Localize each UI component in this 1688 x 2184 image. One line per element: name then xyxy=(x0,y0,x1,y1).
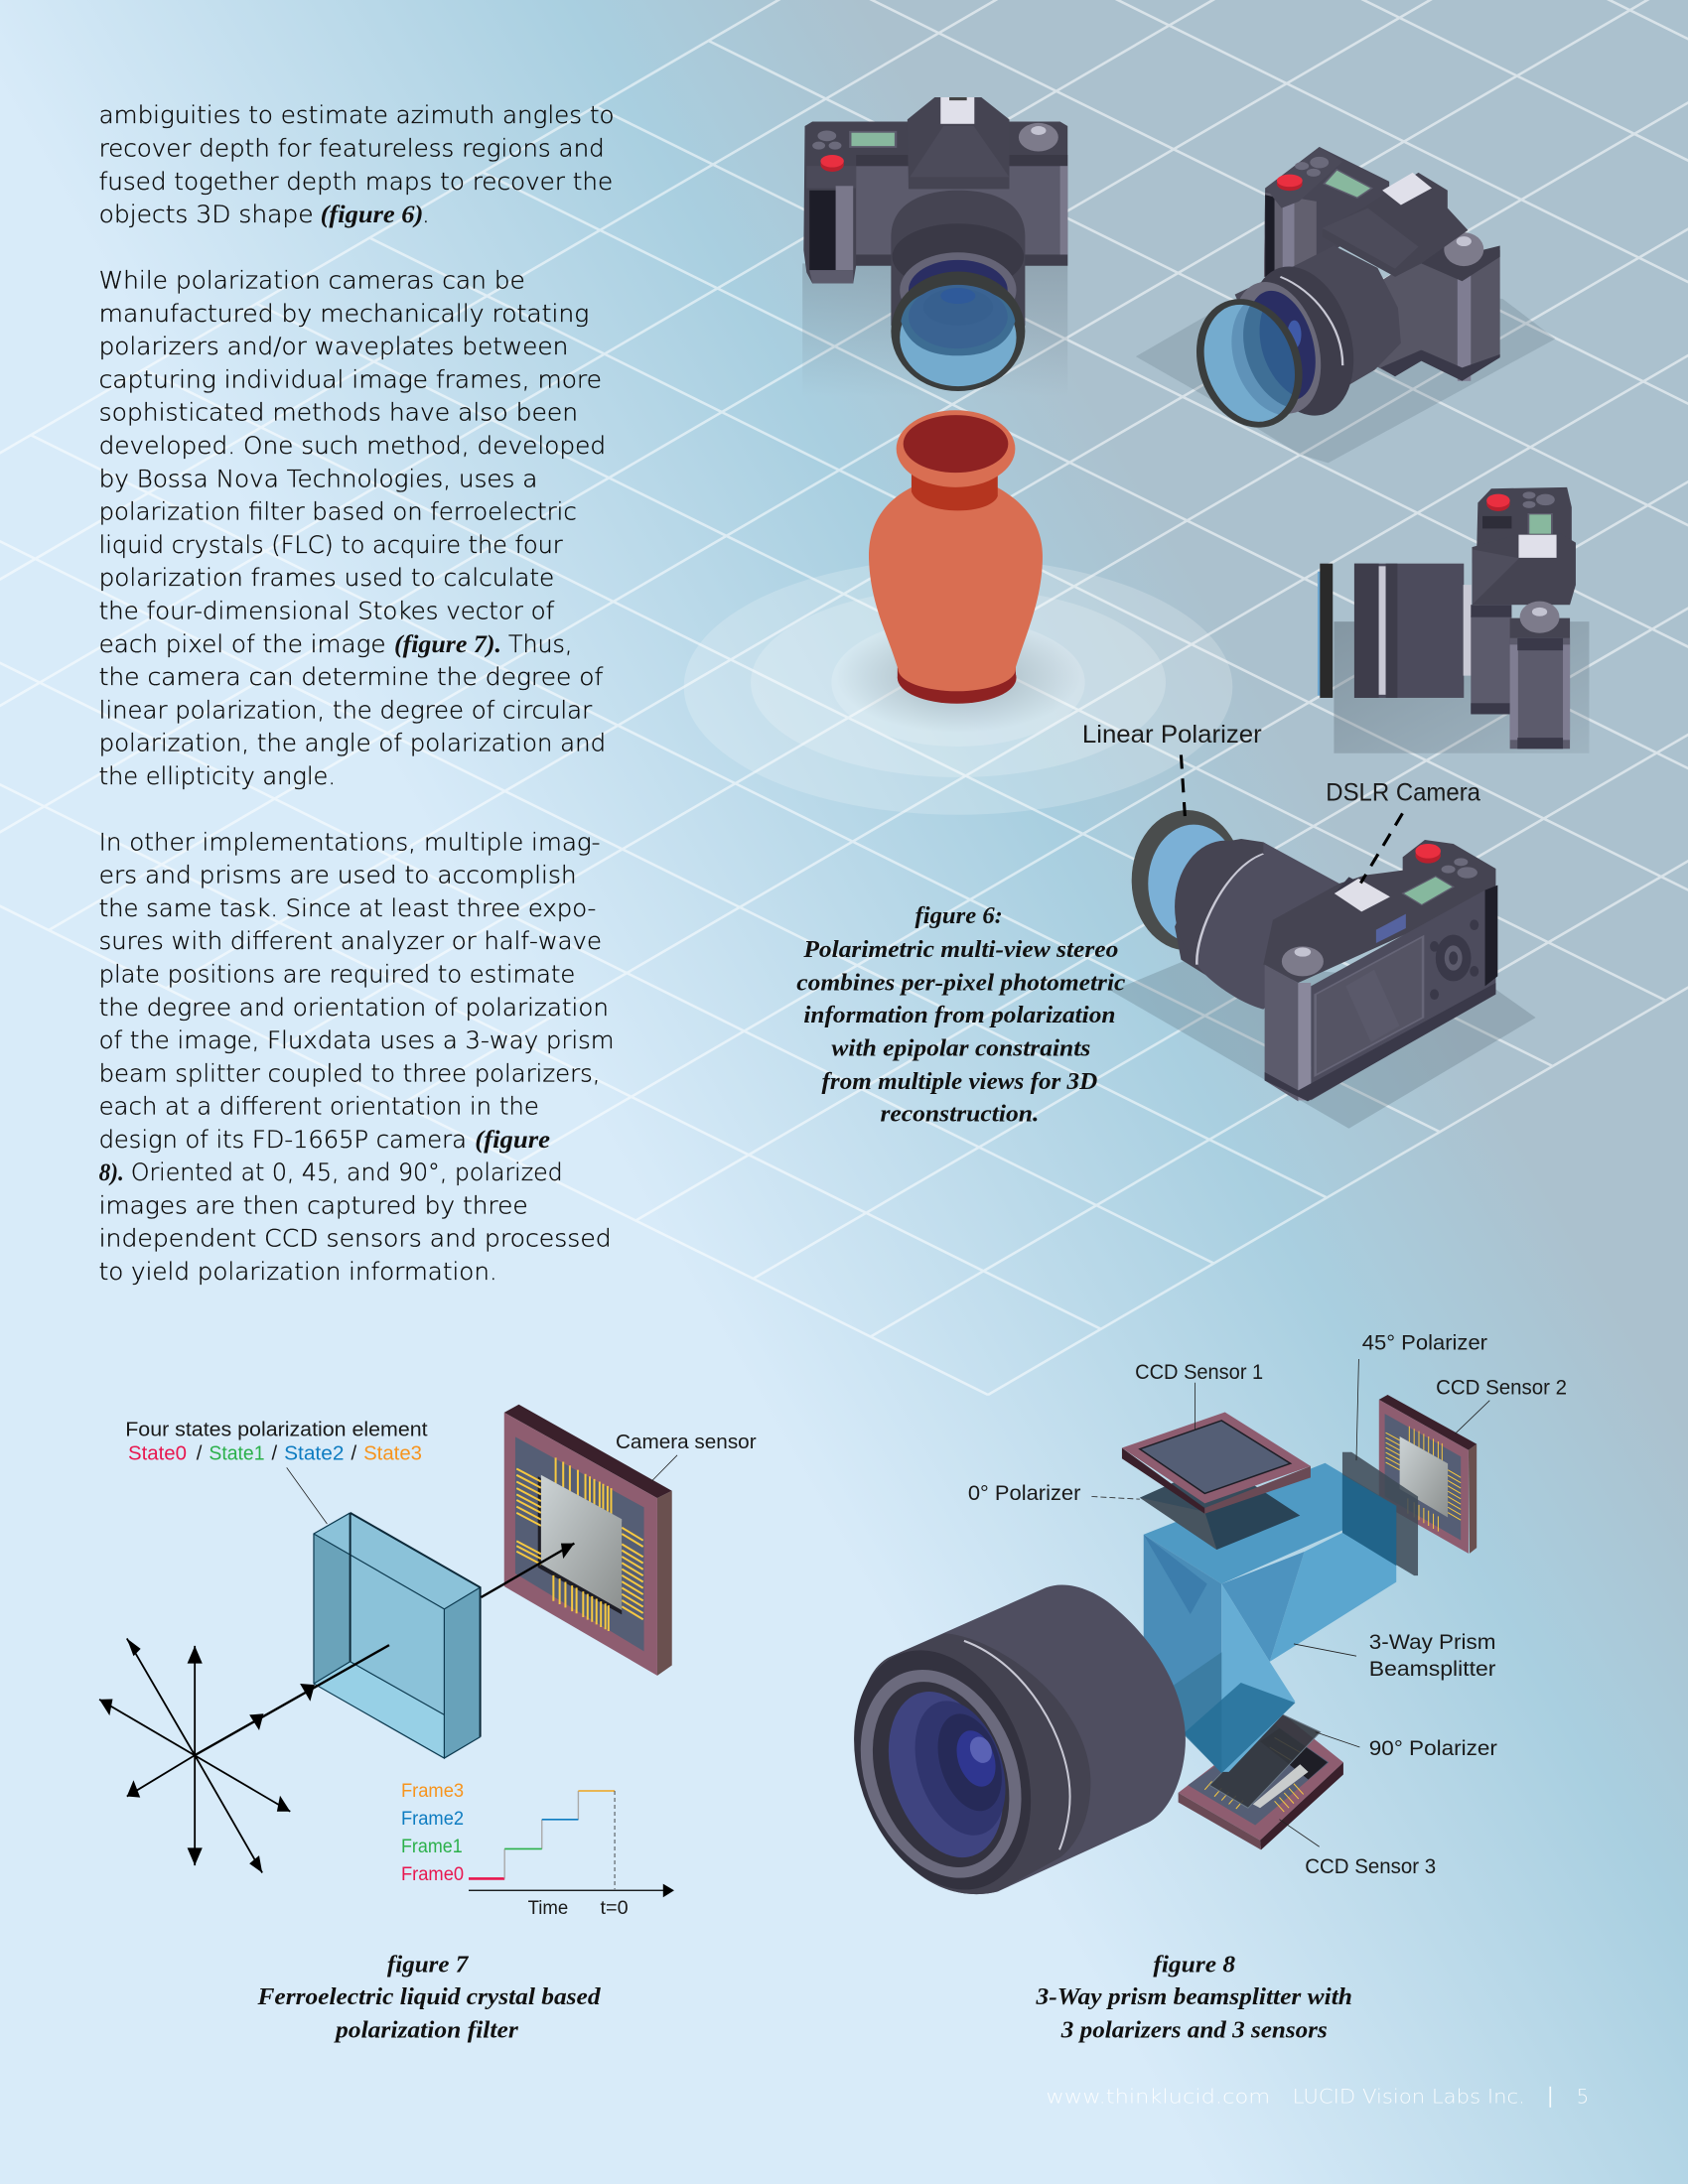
figure 8 labels: Beamsplitter xyxy=(1369,1658,1495,1681)
figure 7 labels: State3 xyxy=(363,1442,422,1464)
figure 7 caption xyxy=(256,1952,601,2044)
body text column: (figure 7). xyxy=(394,630,501,658)
figure 6 labels: Linear Polarizer xyxy=(1082,721,1262,749)
icon: terracotta vase xyxy=(869,410,1043,704)
body text column: each at a different orientation in the xyxy=(99,1092,539,1121)
CCD sensor 1 xyxy=(1122,1413,1311,1514)
body text column: polarizers and/or waveplates between xyxy=(99,332,568,360)
figure 7 labels: / xyxy=(272,1442,278,1464)
footer: 5 xyxy=(1577,2086,1589,2109)
figure 7 labels: Camera sensor xyxy=(616,1432,757,1453)
figure 7 caption: figure 7 xyxy=(387,1952,470,1979)
body text column: linear polarization, the degree of circular xyxy=(99,695,592,724)
45 degree polarizer xyxy=(1342,1452,1418,1575)
figure 8 labels: 3-Way Prism xyxy=(1369,1631,1495,1654)
figure 8 caption: 3 polarizers and 3 sensors xyxy=(1060,2017,1328,2044)
body text column: liquid crystals (FLC) to acquire the four xyxy=(99,530,563,559)
body text column: 8). xyxy=(99,1159,124,1186)
body text column: of the image, Fluxdata uses a 3-way prism xyxy=(99,1025,615,1054)
figure 7 labels: Frame0 xyxy=(401,1864,464,1885)
body text column: design of its FD-1665P camera xyxy=(99,1125,467,1154)
figure 6 caption: reconstruction. xyxy=(880,1100,1039,1127)
icon: camera three-quarter view xyxy=(1136,147,1555,463)
figure 7 labels: Four states polarization element xyxy=(125,1420,428,1441)
figure 8 labels: 90° Polarizer xyxy=(1369,1737,1497,1760)
footer: LUCID Vision Labs Inc. xyxy=(1293,2086,1525,2109)
body text column: objects 3D shape xyxy=(99,200,314,228)
figure 6 caption: from multiple views for 3D xyxy=(822,1068,1097,1095)
body text column: Thus, xyxy=(508,629,572,658)
figure 7 labels: / xyxy=(351,1442,356,1464)
polarization element block xyxy=(314,1513,481,1758)
figure 8 labels xyxy=(968,1332,1567,1878)
figure 8 caption xyxy=(1036,1952,1352,2044)
body text column: images are then captured by three xyxy=(99,1190,528,1219)
figure 8 labels: 45° Polarizer xyxy=(1362,1332,1487,1355)
figure 7 caption: polarization filter xyxy=(334,2017,518,2044)
figure 7 labels: Frame1 xyxy=(401,1837,463,1857)
body text column: sures with different analyzer or half-wave xyxy=(99,926,602,955)
body text column xyxy=(99,100,615,1286)
body text column: plate positions are required to estimate xyxy=(99,959,575,988)
vase ground ripples xyxy=(684,559,1232,815)
body text column: to yield polarization information. xyxy=(99,1257,497,1286)
lens barrel xyxy=(828,1584,1186,1903)
body text column: beam splitter coupled to three polarizers, xyxy=(99,1058,601,1087)
footer xyxy=(1046,2086,1589,2109)
body text column: capturing individual image frames, more xyxy=(99,364,602,393)
body text column: . xyxy=(422,200,430,228)
figure 7 labels: Frame3 xyxy=(401,1781,464,1802)
figure 6 caption: combines per-pixel photometric xyxy=(796,970,1125,997)
figure 7 caption: Ferroelectric liquid crystal based xyxy=(256,1983,601,2010)
icon: camera side view xyxy=(1318,487,1589,753)
callout leader: DSLR camera xyxy=(1360,813,1402,884)
figure 8 labels: CCD Sensor 1 xyxy=(1135,1361,1263,1384)
figure 7 labels: State0 xyxy=(128,1442,187,1464)
figure 8 labels: CCD Sensor 2 xyxy=(1436,1376,1567,1399)
figure 8 labels: 0° Polarizer xyxy=(968,1482,1080,1505)
figure 7 labels: / xyxy=(197,1442,203,1464)
body text column: the same task. Since at least three expo- xyxy=(99,893,596,922)
0 degree polarizer leader xyxy=(1091,1496,1140,1499)
figure 8: three-way prism beamsplitter diagram xyxy=(828,1359,1489,1903)
body text column: independent CCD sensors and processed xyxy=(99,1224,612,1253)
body text column: fused together depth maps to recover the xyxy=(99,167,613,196)
body text column: polarization, the angle of polarization and xyxy=(99,729,606,757)
figure 7: ferroelectric polarization filter diagram xyxy=(99,1405,677,1897)
body text column: the camera can determine the degree of xyxy=(99,662,604,691)
figure 6 caption: information from polarization xyxy=(803,1002,1116,1028)
body text column: (figure xyxy=(475,1126,550,1154)
figure 6 caption: figure 6: xyxy=(915,902,1003,929)
body text column: by Bossa Nova Technologies, uses a xyxy=(99,464,537,492)
body text column: each pixel of the image xyxy=(99,629,386,658)
90 degree polarizer xyxy=(1209,1713,1321,1808)
figure 6 caption: with epipolar constraints xyxy=(831,1035,1090,1062)
body text column: polarization frames used to calculate xyxy=(99,563,554,592)
polarization arrows xyxy=(99,1544,574,1873)
leader lines xyxy=(1196,1359,1489,1846)
figure 6 caption: Polarimetric multi-view stereo xyxy=(802,936,1118,963)
figure 6 labels xyxy=(1082,721,1481,807)
icon: camera front view xyxy=(802,97,1067,396)
0 degree polarizer xyxy=(1140,1462,1300,1550)
body text column: ambiguities to estimate azimuth angles to xyxy=(99,100,615,129)
figure 7 labels xyxy=(125,1420,757,1919)
leader lines xyxy=(287,1455,677,1524)
body text column: the ellipticity angle. xyxy=(99,761,336,790)
figure 6 labels: DSLR Camera xyxy=(1326,779,1481,807)
CCD sensor 3 xyxy=(1179,1713,1343,1849)
figure 7 labels: Frame2 xyxy=(401,1809,464,1830)
figure 8 labels: CCD Sensor 3 xyxy=(1305,1855,1436,1878)
body text column: manufactured by mechanically rotating xyxy=(99,299,589,328)
figure 7 labels: Time xyxy=(528,1898,568,1919)
camera sensor xyxy=(504,1405,672,1676)
body text column: sophisticated methods have also been xyxy=(99,398,578,427)
body text column: While polarization cameras can be xyxy=(99,266,525,295)
callout leader: linear polarizer xyxy=(1181,754,1186,820)
body text column: ers and prisms are used to accomplish xyxy=(99,861,577,889)
figure 7 labels: State2 xyxy=(284,1442,344,1464)
frame timing chart xyxy=(469,1791,674,1897)
figure 6 scene: three cameras and vase xyxy=(802,97,1589,753)
figure 7 labels: State1 xyxy=(209,1442,265,1464)
body text column: the degree and orientation of polarization xyxy=(99,993,609,1022)
body text column: (figure 6) xyxy=(321,201,423,228)
icon: camera rear view with linear polarizer xyxy=(1111,810,1536,1129)
body text column: recover depth for featureless regions and xyxy=(99,133,605,162)
body text column: Oriented at 0, 45, and 90°, polarized xyxy=(131,1158,563,1186)
body text column: In other implementations, multiple imag- xyxy=(99,827,601,856)
three-way prism xyxy=(1144,1463,1397,1773)
body text column: the four-dimensional Stokes vector of xyxy=(99,596,555,624)
body text column: developed. One such method, developed xyxy=(99,431,606,460)
figure 7 labels: t=0 xyxy=(601,1898,629,1919)
footer: www.thinklucid.com xyxy=(1046,2086,1270,2109)
body text column: polarization filter based on ferroelectric xyxy=(99,497,577,526)
figure 8 caption: figure 8 xyxy=(1153,1952,1235,1979)
figure 6 caption xyxy=(796,902,1125,1127)
figure 8 caption: 3-Way prism beamsplitter with xyxy=(1036,1983,1352,2010)
CCD sensor 2 xyxy=(1379,1395,1477,1554)
